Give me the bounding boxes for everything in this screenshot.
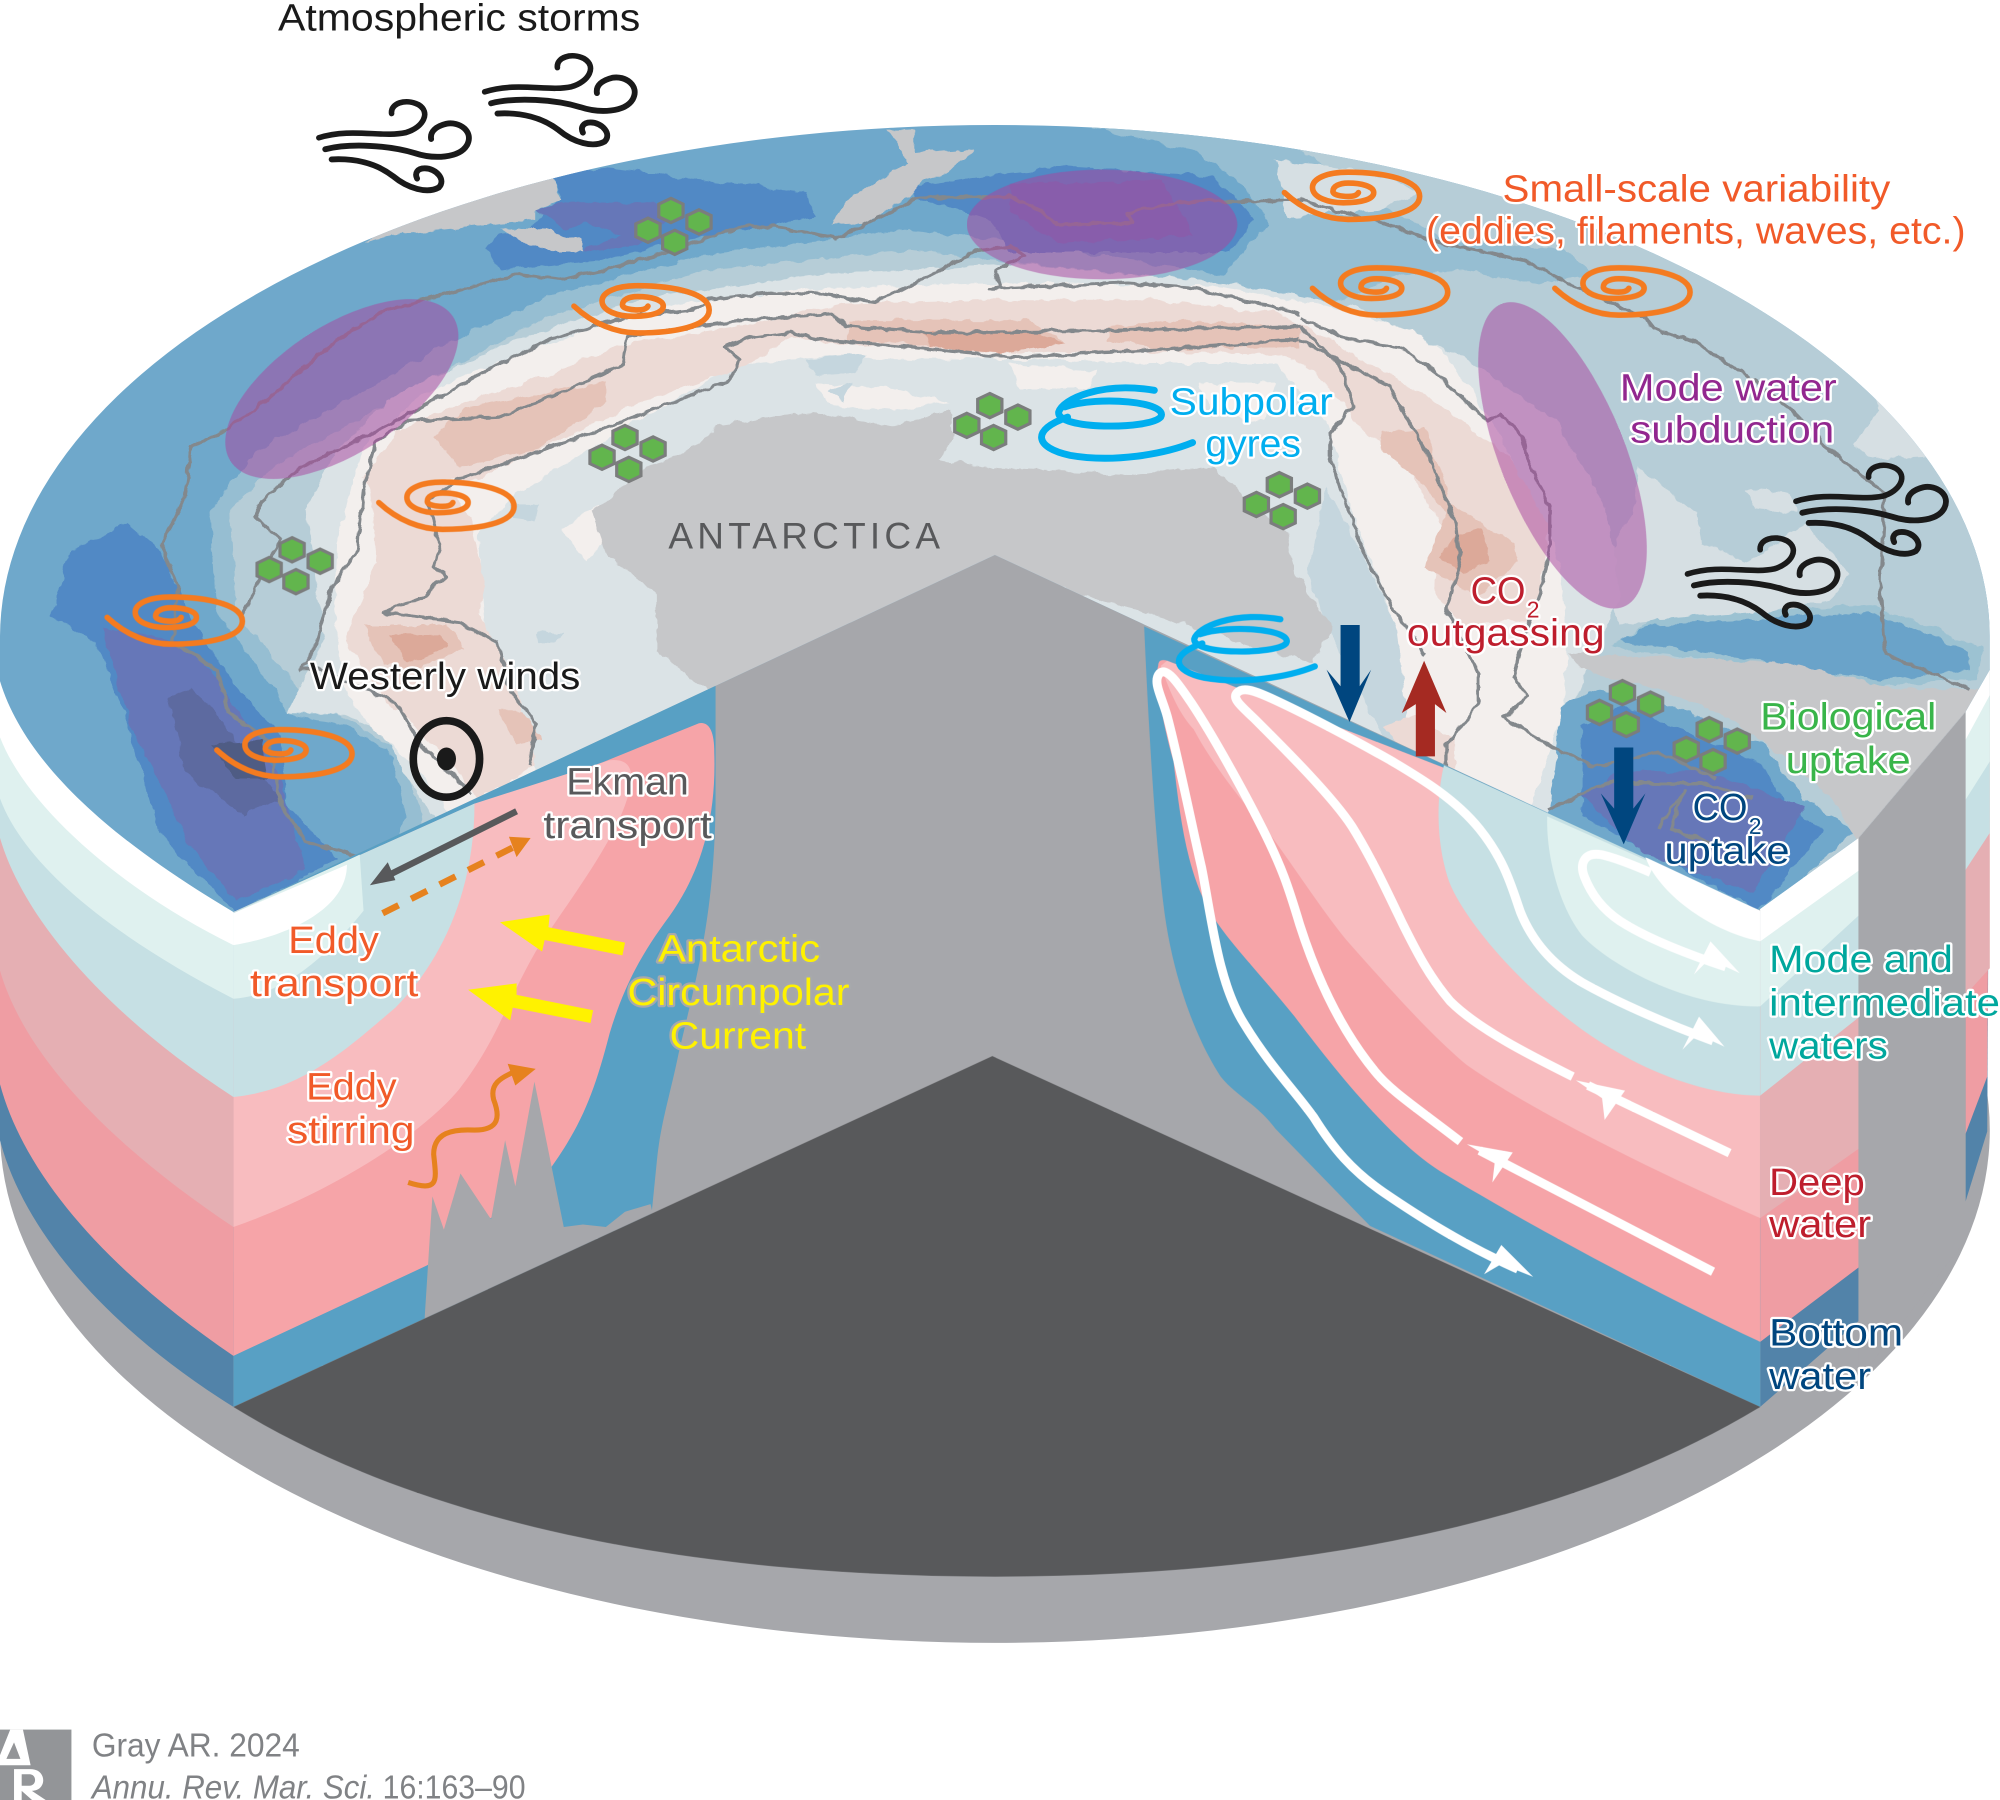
map: deep blue south of New Zealand <box>913 167 1255 253</box>
left face: deep water <box>233 723 714 1356</box>
label: Ekman transport <box>543 761 712 847</box>
label: CO2 outgassing: CO <box>1471 569 1526 612</box>
label: CO2 outgassing <box>1407 569 1605 654</box>
label: small-scale variability: Small-scale variability <box>1503 168 1891 211</box>
right outer side of the cylinder: water layers <box>1760 829 1860 1407</box>
map: ocean front lines <box>162 196 1969 856</box>
circumpolar current arrow lower <box>468 983 593 1023</box>
westerly wind out-of-page symbol <box>413 721 480 797</box>
flow arrow: bottom water loop <box>1157 672 1533 1277</box>
citation <box>90 1727 526 1800</box>
base disk of the cylinder <box>0 617 1990 1643</box>
right face: mode water <box>1547 816 1760 1006</box>
storm wind icons <box>319 56 1946 626</box>
label: mode and intermediate waters <box>1768 938 2000 1068</box>
map: small pale blue spots <box>510 355 867 644</box>
label: mode water subduction: subduction <box>1630 409 1834 452</box>
flow arrow: deep water inflow (upper) <box>1576 1080 1730 1153</box>
subpolar gyre spirals <box>1042 388 1315 680</box>
map: mid blue transition waters <box>209 127 1590 834</box>
circumpolar current arrow upper <box>500 915 625 955</box>
label: eddy stirring: Eddy <box>306 1065 398 1108</box>
label: subpolar gyres <box>1170 381 1333 466</box>
label: CO2 outgassing: outgassing <box>1407 611 1605 654</box>
flow arrow: deep water inflow (lower) <box>1467 1144 1713 1272</box>
CO2 uptake down arrow <box>1601 747 1645 844</box>
left face: mode water <box>233 855 364 999</box>
label: bottom water <box>1768 1312 1903 1398</box>
label: deep water: water <box>1768 1203 1871 1246</box>
label: biological uptake: Biological <box>1760 696 1936 739</box>
label: subpolar gyres: Subpolar <box>1170 381 1333 424</box>
dark floor of the cut-away <box>233 1056 1760 1577</box>
flow arrow: upwelling into intermediate water <box>1236 690 1724 1077</box>
label: mode and intermediate waters: waters <box>1768 1025 1888 1068</box>
map: strongest pink cores <box>389 333 1491 663</box>
label: Ekman transport: transport <box>543 804 712 847</box>
left face: sea-floor ridge <box>425 1082 657 1333</box>
CO2 outgassing up arrow <box>1402 661 1446 756</box>
right face: bottom water <box>1144 626 1760 1407</box>
label: eddy stirring <box>287 1065 415 1152</box>
label: CO2 uptake: CO <box>1693 786 1747 829</box>
central grey wall of the cut-away <box>233 555 1760 1407</box>
label: westerly winds: Westerly winds <box>310 655 580 698</box>
flow arrow: mode water <box>1582 854 1740 974</box>
label: mode and intermediate waters: intermediate <box>1769 981 2000 1024</box>
left face: surface white <box>233 865 347 945</box>
label: biological uptake <box>1760 696 1936 782</box>
label: CO2 outgassing: 2 <box>1527 596 1540 622</box>
map: South Atlantic blue stripe <box>1614 605 1983 686</box>
map: lighter waters near the right rim <box>1274 159 1952 625</box>
map: darker blue core <box>102 626 306 902</box>
left face: intermediate water <box>233 804 474 1097</box>
label: Antarctic Circumpolar Current: Current <box>670 1014 807 1057</box>
label: eddy transport: transport <box>250 962 419 1005</box>
label: eddy stirring: stirring <box>287 1109 415 1152</box>
map: white band of the circumpolar ring <box>334 283 1569 823</box>
map: land <box>364 130 1990 842</box>
label: Ekman transport: Ekman <box>566 761 689 804</box>
right grey wall band <box>1858 712 1966 1380</box>
right face: upper deep water <box>1161 661 1760 1218</box>
label: Antarctic Circumpolar Current <box>628 928 850 1057</box>
label: deep water: Deep <box>1769 1161 1865 1204</box>
Annual Reviews logo <box>0 1730 71 1800</box>
map: pink outgassing areas <box>344 300 1548 800</box>
right face: surface white <box>1645 857 1760 941</box>
label: eddy transport: Eddy <box>288 919 380 962</box>
far right strip of water layers <box>1966 670 1990 1202</box>
CO2 down arrow north <box>1327 625 1371 722</box>
label: deep water <box>1768 1161 1871 1246</box>
map: pale zone around Antarctica <box>287 264 1620 829</box>
label: subpolar gyres: gyres <box>1205 423 1301 466</box>
map: deep blue south of Australia <box>485 167 816 270</box>
left outer side of the cylinder: water layers <box>0 638 233 1407</box>
label: eddy transport <box>250 919 419 1005</box>
right cross-section face <box>1144 626 1760 1407</box>
left face: bottom water <box>233 685 716 1416</box>
label: CO2 uptake: uptake <box>1665 830 1790 873</box>
label: bottom water: Bottom <box>1769 1312 1903 1355</box>
label: mode and intermediate waters: Mode and <box>1769 938 1953 981</box>
label: biological uptake: uptake <box>1786 739 1911 782</box>
citation: Gray AR. 2024 <box>92 1727 300 1764</box>
left face: upper deep water <box>233 760 631 1227</box>
map: white patches along the coast <box>561 364 1276 561</box>
label: Antarctic Circumpolar Current: Circumpolar <box>628 971 850 1014</box>
Ekman transport arrow <box>370 811 517 885</box>
right face: intermediate water <box>1439 765 1760 1096</box>
label: CO2 uptake <box>1665 786 1790 873</box>
eddy stirring wavy arrow <box>408 1064 536 1186</box>
label: Antarctic Circumpolar Current: Antarctic <box>658 928 820 971</box>
label: CO2 uptake: 2 <box>1749 813 1761 839</box>
phytoplankton hexagon clusters <box>257 198 1749 774</box>
map: pale steel-blue waters <box>229 150 1990 878</box>
label: mode water subduction: Mode water <box>1620 367 1837 410</box>
eddy spirals <box>107 172 1690 777</box>
map: blue-grey water between Antarctica and the ring <box>1307 488 1408 741</box>
map: deep blue south-east Pacific <box>51 523 338 913</box>
ocean surface map <box>0 115 2000 944</box>
label: small-scale variability <box>1426 168 1966 253</box>
label: bottom water: water <box>1768 1355 1871 1398</box>
right face: deep water <box>1157 660 1760 1342</box>
map: Weddell side blue <box>1548 691 1855 918</box>
eddy transport dashed arrow <box>383 837 531 913</box>
label: mode water subduction <box>1620 367 1837 452</box>
left cross-section face <box>233 685 716 1416</box>
label: Antarctica: ANTARCTICA <box>668 515 940 556</box>
map: darkest blue core <box>168 689 281 815</box>
label: small-scale variability: (eddies, filaments, waves, etc.) <box>1426 210 1966 253</box>
map: deeper pink areas <box>364 320 1518 745</box>
mode water subduction patches <box>196 170 1682 630</box>
